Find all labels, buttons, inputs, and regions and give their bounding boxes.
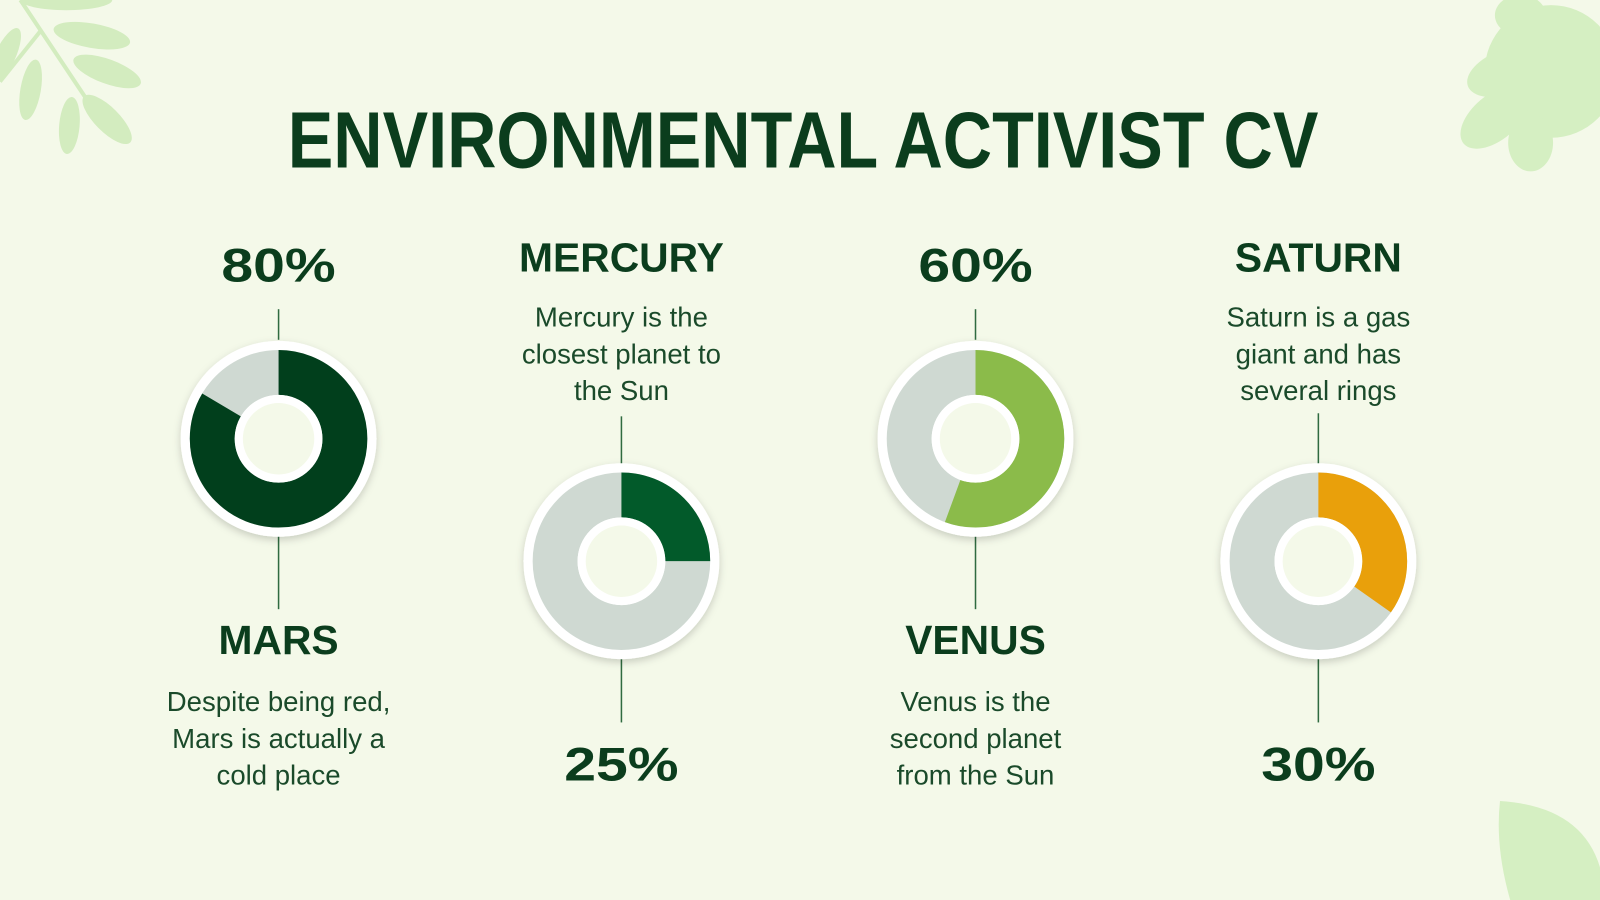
panel: venus: Venus is the	[900, 686, 1051, 717]
panel: mars: cold place	[217, 760, 341, 791]
panel: saturn: several rings	[1240, 375, 1396, 406]
panel: mercury: closest planet to	[522, 338, 721, 369]
decoration: top-left leaf branch	[0, 0, 145, 155]
panel: saturn: 30%	[1261, 739, 1376, 791]
panel: mercury: 25%	[564, 739, 679, 791]
panel: mercury: Mercury is the	[535, 302, 708, 333]
panel: saturn	[1220, 234, 1416, 791]
panel: mercury: MERCURY	[519, 234, 724, 280]
panel: mars	[167, 240, 390, 791]
panel: venus: VENUS	[905, 617, 1046, 663]
decoration: top-right blob	[1449, 0, 1600, 171]
panel: mars: 80%	[221, 240, 336, 292]
panel: venus	[878, 240, 1073, 791]
panel: mars: MARS	[219, 617, 339, 663]
panel: saturn: Saturn is a gas	[1226, 302, 1410, 333]
panel: mars: Despite being red,	[167, 686, 390, 717]
panel: venus: second planet	[890, 723, 1062, 754]
panel: mercury	[519, 234, 724, 791]
panel: venus: from the Sun	[897, 760, 1054, 791]
panel: saturn: giant and has	[1236, 338, 1401, 369]
panel: saturn: SATURN	[1235, 234, 1402, 280]
decoration: bottom-right leaf	[1499, 801, 1600, 900]
panel: mercury: the Sun	[574, 375, 669, 406]
panel: venus: 60%	[918, 240, 1033, 292]
panel: mars: Mars is actually a	[172, 723, 386, 754]
title: ENVIRONMENTAL ACTIVIST CV	[288, 95, 1318, 184]
